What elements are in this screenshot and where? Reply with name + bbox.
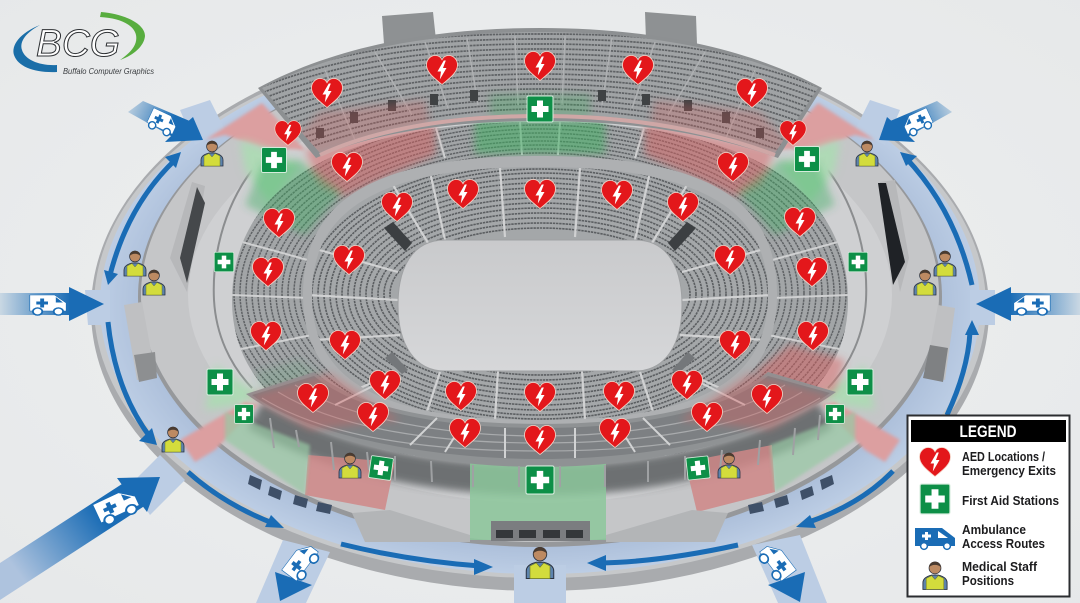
medical staff xyxy=(124,141,956,578)
ambulance route: top right xyxy=(879,101,952,142)
road ring xyxy=(100,36,980,574)
legend item: first aid: First Aid Stations xyxy=(962,493,1059,508)
first aid stations xyxy=(207,96,873,494)
ambulance route: left xyxy=(0,287,104,321)
ambulance route: bottom left inbound xyxy=(0,477,160,600)
top seating zone colours xyxy=(245,120,845,395)
front steps xyxy=(352,510,728,542)
logo xyxy=(13,12,154,76)
outer curb ring xyxy=(91,29,989,591)
ambulance route: bottom right exit xyxy=(756,541,805,602)
zone overlays on concourse xyxy=(180,103,900,462)
gate building centre xyxy=(491,521,590,541)
outer wall windows xyxy=(248,475,834,514)
under-deck shadow xyxy=(255,415,825,480)
road entrances xyxy=(85,100,995,603)
zone under front deck xyxy=(225,412,855,540)
inner seating bowl xyxy=(305,160,775,427)
legend item: staff xyxy=(923,559,1038,589)
legend item: staff: Medical Staff xyxy=(962,559,1038,574)
legend item: first aid xyxy=(920,484,1059,514)
ambulance route: bottom left exit xyxy=(275,541,322,601)
logo: BCG xyxy=(36,23,120,65)
legend item: AED: Emergency Exits xyxy=(962,463,1056,478)
logo: Buffalo Computer Graphics xyxy=(63,67,154,76)
concourse xyxy=(138,47,942,547)
vomitory openings xyxy=(384,222,696,374)
ambulance route: right xyxy=(976,287,1080,321)
legend item: staff: Positions xyxy=(962,573,1014,588)
upper deck xyxy=(258,28,822,158)
scoreboard: left xyxy=(170,182,205,292)
ring road arrows xyxy=(108,158,972,566)
legend item: ambulance xyxy=(915,522,1045,551)
columns xyxy=(270,415,820,487)
front deck seating xyxy=(246,372,836,467)
playing field xyxy=(398,240,682,371)
ring road arrowheads xyxy=(104,152,979,575)
outer seating bowl xyxy=(232,122,848,456)
legend item: AED xyxy=(920,448,1056,478)
scoreboard: right xyxy=(878,180,909,292)
legend item: ambulance: Access Routes xyxy=(962,536,1045,551)
AED hearts xyxy=(250,52,828,454)
outer gate buildings xyxy=(124,302,955,382)
ambulance route: top left xyxy=(128,101,203,142)
legend item: ambulance: Ambulance xyxy=(962,522,1026,537)
inner bowl rim xyxy=(303,156,777,428)
legend: LEGEND xyxy=(960,422,1016,441)
light towers xyxy=(382,12,697,44)
legend item: AED: AED Locations / xyxy=(962,449,1045,464)
legend xyxy=(908,416,1070,596)
